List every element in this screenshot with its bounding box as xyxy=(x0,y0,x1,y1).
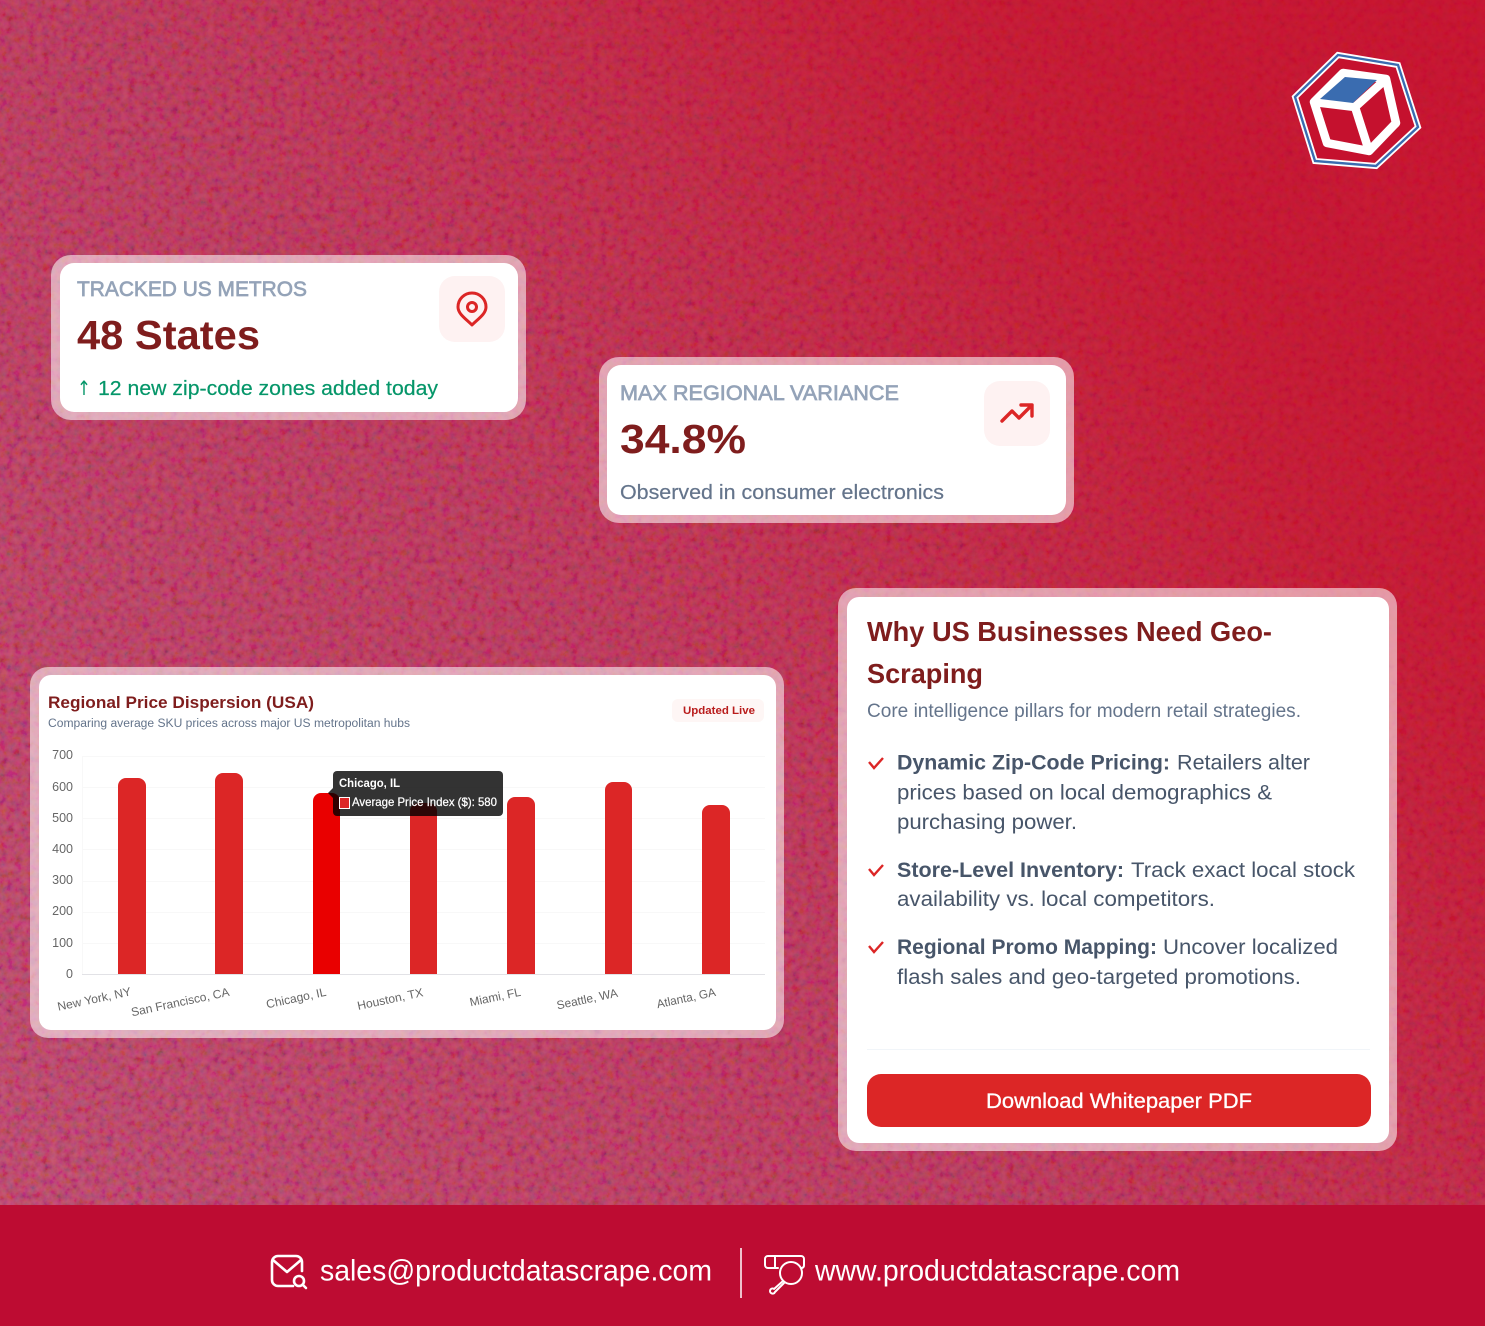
email address: sales@productdatascrape.com xyxy=(320,1254,712,1288)
list item: dynamic zip-code pricing: Retailers alter xyxy=(1177,752,1310,774)
y axis labels: 500 xyxy=(52,811,73,825)
y axis labels: 300 xyxy=(52,873,73,887)
stat card: max regional variance xyxy=(599,357,1074,523)
chart title: Regional Price Dispersion (USA) xyxy=(48,693,314,712)
list item: regional promo mapping: Uncover localized xyxy=(1163,936,1338,959)
panel heading xyxy=(867,616,1272,689)
y axis labels: 700 xyxy=(52,748,73,762)
panel: why US businesses need geo-scraping xyxy=(838,588,1397,1151)
stat card: tracked US metros xyxy=(51,255,526,420)
x axis labels: New York, NY xyxy=(56,984,132,1014)
list item: store-level inventory: availability vs. local competitors. xyxy=(897,888,1215,911)
icon: browser bar with magnifier xyxy=(765,1256,804,1294)
list item: regional promo mapping xyxy=(869,936,1338,989)
website address: www.productdatascrape.com xyxy=(814,1254,1180,1288)
x axis labels: Atlanta, GA xyxy=(655,985,717,1011)
x axis labels: Houston, TX xyxy=(356,985,424,1013)
panel heading: Why US Businesses Need Geo- xyxy=(867,616,1272,647)
bars xyxy=(118,773,730,974)
list item: store-level inventory: Track exact local stock xyxy=(1131,859,1356,882)
x axis labels: San Francisco, CA xyxy=(130,985,231,1019)
y axis labels: 200 xyxy=(52,904,73,918)
label: max regional variance: MAX REGIONAL VARIANCE xyxy=(620,382,899,405)
trend note: 12 new zip-code zones added today xyxy=(98,378,438,400)
value: 48 states: 48 States xyxy=(77,312,260,358)
badge: updated live: Updated Live xyxy=(683,705,755,717)
list item: dynamic zip-code pricing: prices based on local demographics & xyxy=(897,782,1272,804)
value: 34.8%: 34.8% xyxy=(620,416,746,462)
icon: envelope with magnifier xyxy=(272,1256,306,1288)
y axis labels: 400 xyxy=(52,842,73,856)
x axis labels: Miami, FL xyxy=(468,985,522,1009)
list item: dynamic zip-code pricing xyxy=(869,752,1310,834)
bar chart xyxy=(52,748,765,1019)
list item: dynamic zip-code pricing: purchasing power. xyxy=(897,811,1077,834)
y axis labels: 100 xyxy=(52,936,73,950)
button: download whitepaper: Download Whitepaper PDF xyxy=(986,1090,1252,1113)
list item: store-level inventory: Store-Level Inventory: xyxy=(897,859,1124,882)
panel subtitle: Core intelligence pillars for modern retail strategies. xyxy=(867,701,1301,722)
panel heading: Scraping xyxy=(867,658,983,689)
y axis labels: 600 xyxy=(52,780,73,794)
x axis labels: Chicago, IL xyxy=(265,985,328,1011)
chart subtitle: Comparing average SKU prices across major US metropolitan hubs xyxy=(48,718,410,730)
note: consumer electronics: Observed in consumer electronics xyxy=(620,482,944,504)
footer band xyxy=(0,1205,1485,1326)
tooltip: chicago: Average Price Index ($): 580 xyxy=(352,795,497,809)
trend note: ↑ xyxy=(77,376,91,400)
list item: regional promo mapping: flash sales and geo-targeted promotions. xyxy=(897,966,1301,989)
list item: store-level inventory xyxy=(869,859,1356,911)
x axis labels xyxy=(56,984,717,1019)
y axis labels: 0 xyxy=(66,967,73,981)
badge: updated live xyxy=(672,699,764,722)
button: download whitepaper xyxy=(867,1074,1371,1127)
icon: trending up arrow xyxy=(984,381,1050,446)
list item: dynamic zip-code pricing: Dynamic Zip-Code Pricing: xyxy=(897,752,1170,774)
icon: hexagonal cube logo xyxy=(1295,55,1418,166)
icon: location pin xyxy=(439,276,505,342)
panel: regional price dispersion chart xyxy=(30,667,784,1038)
list item: regional promo mapping: Regional Promo Mapping: xyxy=(897,936,1157,959)
label: tracked us metros: TRACKED US METROS xyxy=(77,278,307,301)
y axis labels xyxy=(52,748,73,981)
tooltip: chicago: Chicago, IL xyxy=(339,776,400,790)
x axis labels: Seattle, WA xyxy=(555,986,619,1012)
tooltip: chicago xyxy=(328,771,503,816)
